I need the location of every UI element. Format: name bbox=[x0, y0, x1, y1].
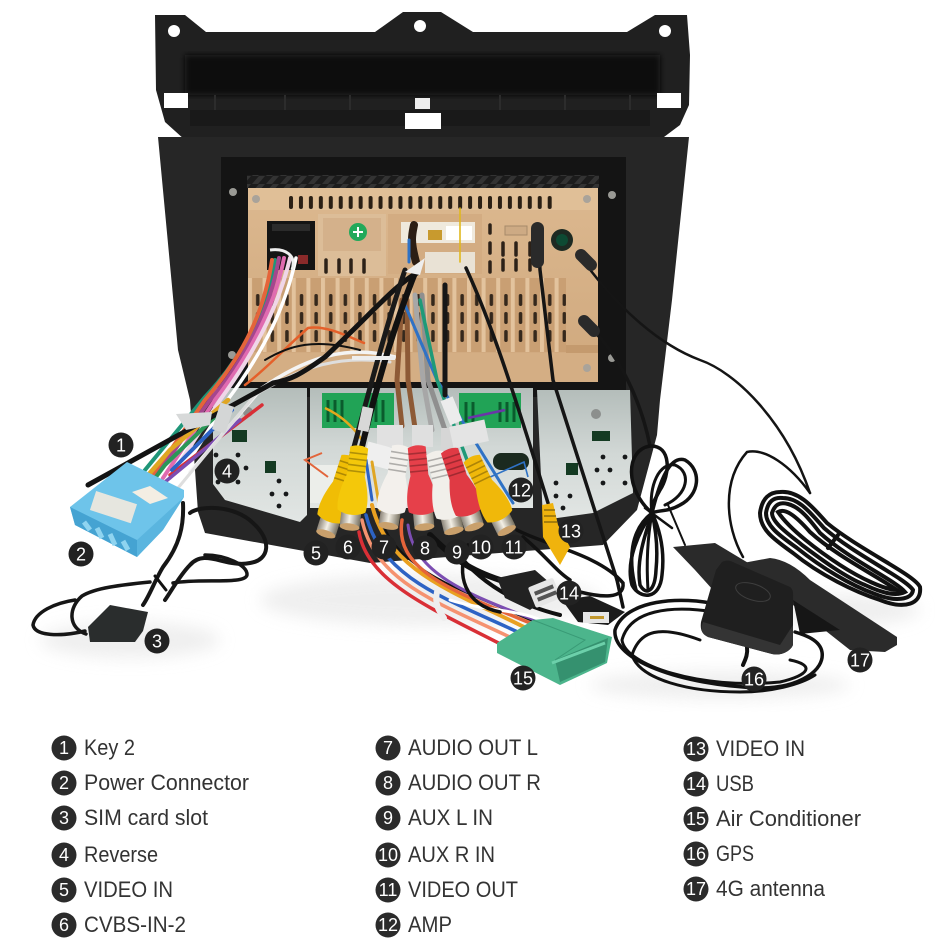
RCA plugs bbox=[311, 443, 522, 542]
legend item 17: 4G antenna bbox=[716, 876, 826, 901]
GPS receiver cable bbox=[615, 600, 822, 692]
plug 5 bbox=[311, 451, 365, 542]
legend item 3: SIM card slot bbox=[84, 805, 208, 830]
legend item 1 bbox=[52, 735, 135, 760]
callout numbers on photo bbox=[68, 432, 872, 692]
marker 14: 14 bbox=[559, 584, 579, 604]
legend item 12: AMP bbox=[408, 912, 452, 937]
legend item 9 bbox=[376, 805, 493, 830]
legend item 13: VIDEO IN bbox=[716, 736, 805, 761]
legend item 16: 16 bbox=[686, 844, 706, 864]
white sockets bbox=[401, 222, 475, 243]
legend item 12 bbox=[376, 912, 452, 938]
marker 10: 10 bbox=[471, 538, 491, 558]
photo: head unit with frame bbox=[155, 12, 690, 563]
marker 14 bbox=[556, 580, 582, 606]
video in 13 plug bbox=[542, 503, 570, 565]
cable boots bbox=[531, 222, 602, 339]
plug 10 bbox=[435, 444, 489, 535]
legend item 4 bbox=[52, 842, 158, 868]
marker 8 bbox=[412, 536, 438, 560]
marker 3 bbox=[144, 628, 170, 654]
plug 8 bbox=[402, 444, 439, 532]
legend: column 2 bbox=[376, 735, 541, 938]
marker 16: 16 bbox=[744, 670, 764, 690]
marker 4: 4 bbox=[222, 462, 232, 482]
usb connector lower bbox=[497, 570, 561, 610]
marker 11 bbox=[502, 534, 526, 560]
cable ties and labels bbox=[176, 250, 489, 471]
blue power connector bbox=[70, 462, 184, 557]
legend item 14: USB bbox=[716, 771, 754, 796]
marker 17 bbox=[848, 648, 872, 672]
legend item 6: CVBS-IN-2 bbox=[84, 912, 186, 937]
screws bbox=[228, 188, 616, 362]
marker 5: 5 bbox=[311, 544, 321, 564]
marker 5 bbox=[304, 540, 328, 566]
4G antenna cable coil bbox=[729, 451, 920, 605]
frame body bbox=[158, 137, 689, 563]
marker 16 bbox=[742, 666, 766, 692]
vent holes upper bbox=[326, 225, 530, 272]
inner bezel bbox=[221, 157, 626, 397]
legend item 15: Air Conditioner bbox=[716, 806, 861, 831]
marker 3: 3 bbox=[152, 632, 162, 652]
legend item 13 bbox=[684, 736, 805, 762]
air conditioner harness bbox=[359, 460, 540, 650]
marker 10 bbox=[468, 534, 494, 560]
usb connector right bbox=[562, 596, 625, 625]
legend item 14: 14 bbox=[686, 774, 706, 794]
legend item 6: 6 bbox=[59, 915, 69, 935]
central signal cables bbox=[351, 208, 810, 580]
legend item 11: VIDEO OUT bbox=[408, 877, 518, 902]
marker 13: 13 bbox=[561, 522, 581, 542]
legend item 11: 11 bbox=[379, 880, 397, 900]
marker 6: 6 bbox=[343, 538, 353, 558]
legend item 3: 3 bbox=[59, 808, 69, 828]
legend item 16: GPS bbox=[716, 841, 754, 866]
legend item 5: VIDEO IN bbox=[84, 877, 173, 902]
left metal plate bbox=[213, 388, 307, 522]
port label area bbox=[323, 218, 381, 251]
legend item 2: 2 bbox=[59, 773, 69, 793]
legend: column 1 bbox=[52, 735, 249, 938]
legend item 8: 8 bbox=[383, 773, 393, 793]
GPS module bbox=[701, 561, 793, 655]
GPS and radio sockets bbox=[505, 226, 527, 235]
marker 9 bbox=[444, 540, 470, 564]
legend: column 3 bbox=[684, 736, 861, 902]
marker 12: 12 bbox=[511, 480, 531, 500]
marker 9: 9 bbox=[452, 542, 462, 562]
marker 2 bbox=[68, 542, 94, 566]
legend item 17: 17 bbox=[686, 879, 706, 899]
green air-conditioner connector bbox=[497, 618, 612, 685]
green sticker bbox=[349, 223, 367, 241]
marker 8: 8 bbox=[420, 538, 430, 558]
legend item 10 bbox=[376, 842, 495, 868]
soft ground shadows bbox=[40, 574, 920, 699]
marker 17: 17 bbox=[850, 650, 870, 670]
plug 6 bbox=[334, 444, 374, 532]
plug 11 bbox=[458, 450, 522, 540]
plug 7 bbox=[373, 443, 416, 532]
marker 1 bbox=[108, 432, 134, 458]
power harness wires bbox=[88, 258, 417, 490]
legend item 15: 15 bbox=[686, 809, 706, 829]
legend item 8: AUDIO OUT R bbox=[408, 770, 541, 795]
usb and rca black cables bbox=[430, 530, 623, 615]
coil of cable bbox=[630, 446, 696, 595]
legend item 2: Power Connector bbox=[84, 770, 249, 795]
marker 15 bbox=[510, 666, 536, 690]
legend item 10: AUX R IN bbox=[408, 842, 495, 867]
legend item 13: 13 bbox=[686, 739, 706, 759]
marker 7 bbox=[372, 534, 396, 560]
legend item 7: AUDIO OUT L bbox=[408, 735, 538, 760]
SIM slot module bbox=[88, 605, 148, 642]
legend item 14 bbox=[684, 771, 754, 796]
marker 15: 15 bbox=[513, 668, 533, 688]
gold head unit chassis bbox=[248, 188, 598, 382]
legend item 4: Reverse bbox=[84, 842, 158, 867]
marker 2: 2 bbox=[76, 544, 86, 564]
SIM card cable bbox=[33, 503, 266, 635]
marker 12 bbox=[508, 478, 534, 502]
legend item 9: 9 bbox=[383, 808, 393, 828]
marker 13 bbox=[558, 518, 584, 544]
legend item 5: 5 bbox=[59, 880, 69, 900]
legend item 9: AUX L IN bbox=[408, 805, 493, 830]
power socket bbox=[267, 221, 315, 270]
antenna pads bbox=[673, 543, 897, 652]
legend item 12: 12 bbox=[378, 915, 398, 935]
middle metal plate bbox=[310, 388, 533, 508]
legend item 4: 4 bbox=[59, 845, 69, 865]
legend item 16 bbox=[684, 841, 754, 866]
legend item 5 bbox=[52, 877, 173, 902]
mounting frame top bar bbox=[155, 12, 690, 140]
marker 11: 11 bbox=[505, 538, 523, 558]
legend item 1: 1 bbox=[59, 738, 69, 758]
legend item 10: 10 bbox=[378, 845, 398, 865]
marker 4 bbox=[214, 458, 240, 484]
plug 9 bbox=[420, 448, 469, 538]
marker 1: 1 bbox=[116, 436, 126, 456]
plate details bbox=[214, 393, 627, 510]
right metal plate bbox=[537, 390, 633, 520]
legend item 7: 7 bbox=[383, 738, 393, 758]
legend item 1: Key 2 bbox=[84, 735, 135, 760]
marker 6 bbox=[336, 534, 360, 560]
marker 7: 7 bbox=[379, 538, 389, 558]
